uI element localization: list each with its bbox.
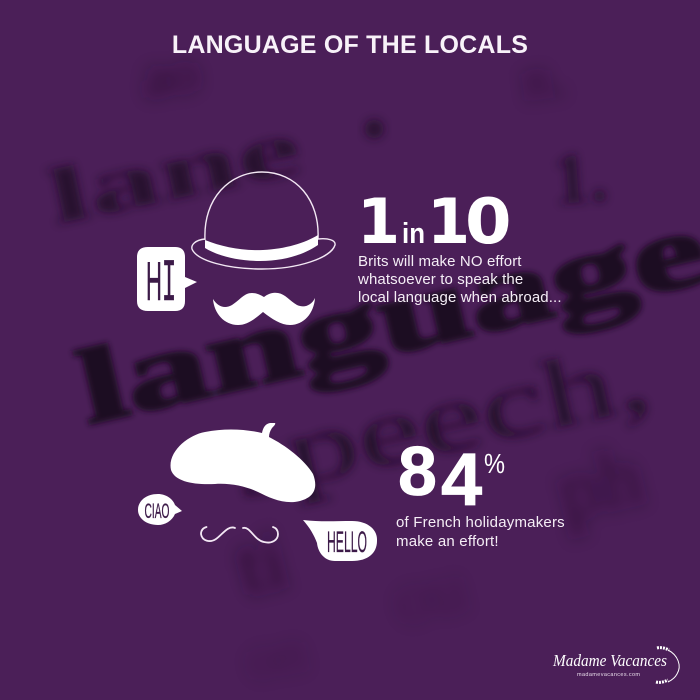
background: blurred dictionary page: n.	[518, 46, 568, 113]
background: blurred dictionary page: •	[362, 91, 387, 168]
stat: 84%: 8	[398, 432, 437, 510]
icon: thin moustache	[201, 527, 278, 543]
speech bubble: CIAO: CIAO	[144, 500, 170, 523]
speech bubble: HI: HI	[146, 250, 176, 318]
stat: 1 in 10: 1	[427, 185, 470, 258]
text block: Brits description: Brits will make NO effort	[358, 252, 522, 270]
logo: Madame Vacances	[552, 648, 679, 682]
stat: 1 in 10	[357, 185, 512, 258]
background: blurred dictionary page: ou	[386, 546, 474, 641]
illustration: beret with thin moustache and speech bubbles	[138, 423, 377, 561]
icon: moustache	[213, 293, 315, 325]
speech bubble: HI	[137, 247, 197, 318]
text block: French description: of French holidaymakers	[396, 514, 565, 531]
speech bubble: HELLO	[303, 520, 377, 561]
stat: 84%	[398, 432, 505, 521]
text block: French description: make an effort!	[396, 532, 499, 550]
background: blurred dictionary page: speech,	[221, 321, 659, 518]
background: blurred dictionary page: 1.	[551, 136, 610, 220]
background: blurred dictionary page: on	[241, 617, 311, 693]
background: blurred dictionary page: ti	[228, 512, 295, 614]
logo: Madame Vacances: Madame Vacances	[552, 651, 667, 670]
icon: beret	[171, 423, 315, 502]
text block: Brits description	[358, 252, 562, 306]
icon: bowler hat	[192, 172, 335, 269]
stat: 84%: 4	[441, 438, 482, 521]
title: LANGUAGE OF THE LOCALS	[172, 31, 528, 59]
stat: 1 in 10: 1	[357, 185, 400, 258]
background: blurred dictionary page: language	[67, 188, 700, 446]
background: blurred dictionary page: ph	[548, 429, 651, 539]
text block: French description	[396, 514, 565, 550]
text block: Brits description: local language when abroad...	[358, 289, 562, 306]
speech bubble: CIAO	[138, 494, 182, 525]
speech bubble: HELLO: HELLO	[327, 526, 367, 559]
background: blurred dictionary page: lane	[40, 103, 308, 241]
logo: Madame Vacances: madamevacances.com	[577, 672, 640, 678]
stat: 1 in 10: in	[402, 218, 425, 250]
stat: 1 in 10: 0	[465, 186, 512, 258]
text block: Brits description: whatsoever to speak the	[358, 271, 523, 288]
stat: 84%: %	[484, 448, 505, 479]
background: blurred dictionary page: ao	[138, 38, 203, 111]
